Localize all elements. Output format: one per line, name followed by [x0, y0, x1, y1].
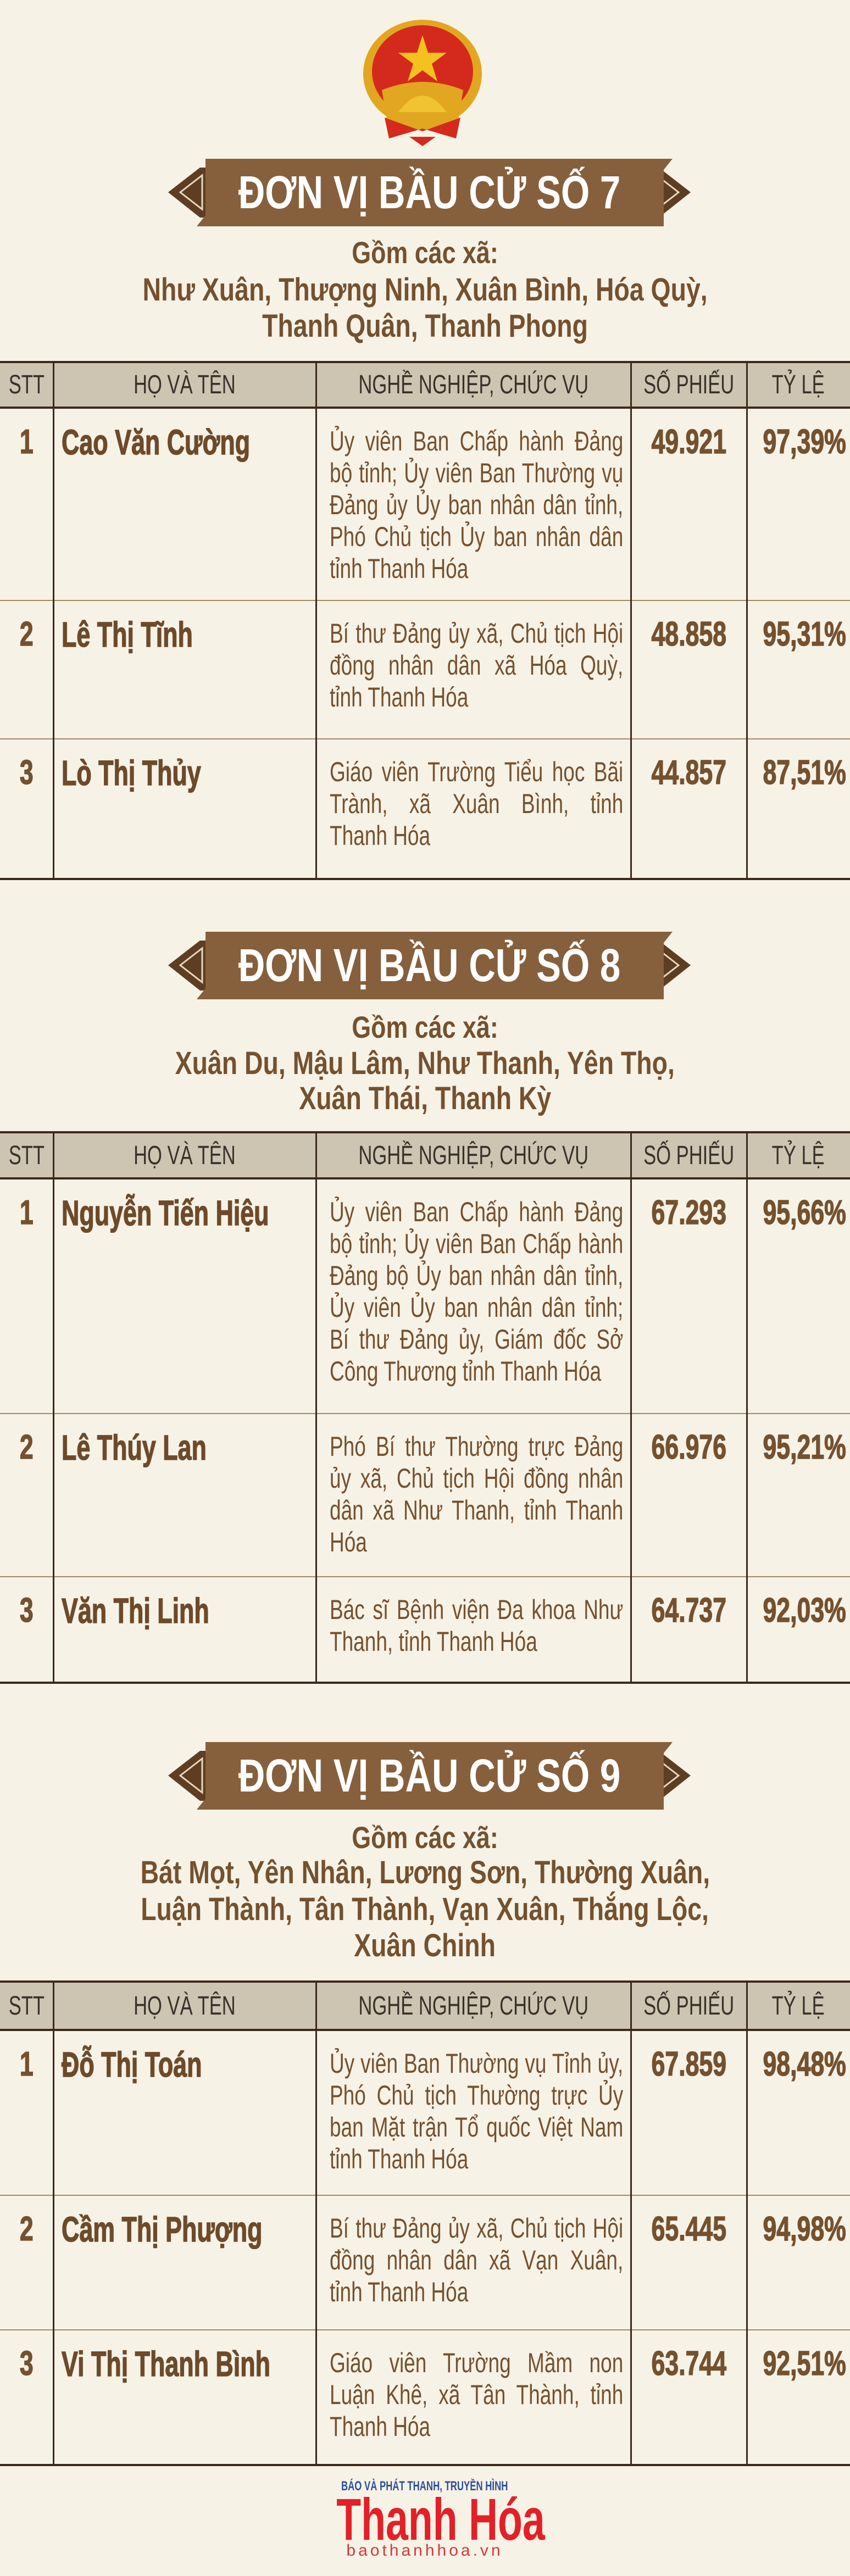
- row 1: 49.921: [651, 423, 726, 461]
- row 1: Đảng bộ Ủy ban nhân dân tỉnh,: [330, 1260, 623, 1291]
- row 1: Ủy viên Ủy ban nhân dân tỉnh;: [330, 1292, 623, 1323]
- row 1: 1: [20, 1194, 34, 1232]
- row 2: [0, 1414, 850, 1577]
- banner: section 9 title: [168, 1742, 691, 1810]
- row 3: 92,03%: [763, 1592, 846, 1629]
- row 3: 44.857: [651, 754, 726, 792]
- row 3: Thanh Hóa: [330, 820, 430, 851]
- banner: section 8 title: ĐƠN VỊ BẦU CỬ SỐ 8: [238, 939, 620, 991]
- row 3: [0, 1577, 850, 1684]
- row 2: Hóa: [330, 1527, 367, 1557]
- section 9: [140, 1742, 710, 1963]
- table: section 9: HỌ VÀ TÊN: [134, 1991, 236, 2021]
- communes: section 7: Gồm các xã:: [352, 235, 498, 270]
- row 1: Cao Văn Cường: [62, 422, 250, 462]
- row 1: tỉnh Thanh Hóa: [330, 2144, 468, 2174]
- row 2: đồng nhân dân xã Hóa Quỳ,: [330, 650, 623, 681]
- row 1: Công Thương tỉnh Thanh Hóa: [330, 1356, 601, 1387]
- communes: section 9: Xuân Chinh: [354, 1928, 496, 1963]
- row 1: 67.293: [651, 1194, 726, 1232]
- banner: section 8 title: [168, 932, 691, 999]
- row 1: 1: [20, 423, 34, 461]
- table: section 7: [0, 361, 850, 880]
- row 3: [0, 2330, 850, 2466]
- row 2: [0, 2196, 850, 2330]
- row 3: 3: [20, 1592, 34, 1629]
- row 1: Ủy viên Ban Chấp hành Đảng: [330, 426, 623, 457]
- section 8: [168, 932, 691, 1116]
- row 1: [0, 2031, 850, 2196]
- table: section 9: NGHỀ NGHIỆP, CHỨC VỤ: [358, 1991, 588, 2021]
- row 3: Luận Khê, xã Tân Thành, tỉnh: [330, 2379, 623, 2410]
- row 3: Thanh Hóa: [330, 2411, 430, 2442]
- row 1: ban Mặt trận Tổ quốc Việt Nam: [330, 2112, 623, 2143]
- table: section 8: HỌ VÀ TÊN: [134, 1140, 236, 1170]
- footer logo: baothanhhoa.vn: [346, 2541, 503, 2560]
- banner: section 7 title: ĐƠN VỊ BẦU CỬ SỐ 7: [238, 166, 620, 218]
- row 2: 95,21%: [763, 1428, 846, 1466]
- banner: section 9 title: ĐƠN VỊ BẦU CỬ SỐ 9: [238, 1750, 620, 1801]
- row 2: Bí thư Đảng ủy xã, Chủ tịch Hội: [330, 618, 623, 649]
- communes: section 9: [140, 1820, 710, 1963]
- row 2: 95,31%: [763, 615, 846, 653]
- row 3: Lò Thị Thủy: [62, 753, 201, 793]
- row 1: tỉnh Thanh Hóa: [330, 553, 468, 584]
- communes: section 8: Xuân Du, Mậu Lâm, Như Thanh, Yên Thọ,: [175, 1045, 675, 1081]
- row 2: 94,98%: [763, 2210, 846, 2248]
- row 2: Bí thư Đảng ủy xã, Chủ tịch Hội: [330, 2213, 623, 2244]
- communes: section 7: [142, 235, 708, 344]
- row 2: đồng nhân dân xã Vạn Xuân,: [330, 2245, 623, 2275]
- row 2: 66.976: [651, 1428, 726, 1466]
- communes: section 9: Bát Mọt, Yên Nhân, Lương Sơn, Thường Xuân,: [140, 1855, 710, 1890]
- row 2: 2: [20, 615, 34, 653]
- row 1: Phó Chủ tịch Thường trực Ủy: [330, 2080, 623, 2111]
- row 3: 63.744: [651, 2345, 726, 2383]
- row 2: tỉnh Thanh Hóa: [330, 682, 468, 713]
- communes: section 8: Gồm các xã:: [352, 1010, 498, 1044]
- table: section 7: HỌ VÀ TÊN: [134, 370, 236, 399]
- communes: section 7: Thanh Quân, Thanh Phong: [262, 308, 588, 344]
- row 2: Lê Thúy Lan: [62, 1428, 207, 1467]
- row 2: 48.858: [651, 615, 726, 653]
- table: section 8: STT: [9, 1140, 45, 1170]
- row 3: 3: [20, 754, 34, 792]
- row 3: Giáo viên Trường Mầm non: [330, 2347, 623, 2378]
- row 1: Đảng ủy Ủy ban nhân dân tỉnh,: [330, 489, 623, 520]
- row 2: 65.445: [651, 2210, 726, 2248]
- row 3: Bác sĩ Bệnh viện Đa khoa Như: [330, 1594, 623, 1625]
- emblem: [363, 20, 482, 146]
- footer logo: Thanh Hóa: [336, 2486, 545, 2552]
- row 3: [0, 739, 850, 880]
- row 3: 92,51%: [763, 2345, 846, 2383]
- row 3: Văn Thị Linh: [62, 1591, 209, 1631]
- row 1: 98,48%: [763, 2045, 846, 2083]
- table: section 9: SỐ PHIẾU: [643, 1991, 734, 2021]
- row 1: Ủy viên Ban Chấp hành Đảng: [330, 1197, 623, 1227]
- row 1: [0, 1179, 850, 1414]
- communes: section 8: [175, 1010, 675, 1116]
- row 3: Vi Thị Thanh Bình: [62, 2344, 270, 2384]
- table: section 7: TỶ LỆ: [772, 370, 825, 399]
- table: section 8: TỶ LỆ: [772, 1140, 825, 1170]
- row 1: Phó Chủ tịch Ủy ban nhân dân: [330, 521, 623, 552]
- row 2: 2: [20, 2210, 34, 2248]
- row 1: Ủy viên Ban Thường vụ Tỉnh ủy,: [330, 2048, 623, 2079]
- row 3: Giáo viên Trường Tiểu học Bãi: [330, 756, 623, 787]
- table: section 9: STT: [9, 1991, 45, 2021]
- row 1: Đỗ Thị Toán: [62, 2045, 202, 2084]
- row 2: Lê Thị Tĩnh: [62, 615, 193, 654]
- row 1: Bí thư Đảng ủy, Giám đốc Sở: [330, 1324, 623, 1355]
- row 3: Thanh, tỉnh Thanh Hóa: [330, 1626, 537, 1657]
- banner: section 7 title: [168, 159, 691, 226]
- row 3: 64.737: [651, 1592, 726, 1629]
- footer logo: BÁO VÀ PHÁT THANH, TRUYỀN HÌNH: [341, 2479, 508, 2494]
- row 2: ủy xã, Chủ tịch Hội đồng nhân: [330, 1463, 623, 1494]
- row 3: Trành, xã Xuân Bình, tỉnh: [330, 788, 623, 819]
- row 1: [0, 409, 850, 601]
- row 1: 97,39%: [763, 423, 846, 461]
- row 1: 95,66%: [763, 1194, 846, 1232]
- row 1: bộ tỉnh; Ủy viên Ban Chấp hành: [330, 1228, 623, 1259]
- table: section 9: TỶ LỆ: [772, 1991, 825, 2021]
- row 2: tỉnh Thanh Hóa: [330, 2277, 468, 2307]
- row 1: 67.859: [651, 2045, 726, 2083]
- row 2: 2: [20, 1428, 34, 1466]
- table: section 7: SỐ PHIẾU: [643, 370, 734, 399]
- row 2: Cầm Thị Phượng: [62, 2210, 262, 2249]
- table: section 8: SỐ PHIẾU: [643, 1140, 734, 1170]
- row 1: bộ tỉnh; Ủy viên Ban Thường vụ: [330, 458, 623, 488]
- row 3: 3: [20, 2345, 34, 2383]
- row 2: [0, 601, 850, 739]
- row 1: Nguyễn Tiến Hiệu: [62, 1193, 269, 1233]
- communes: section 7: Như Xuân, Thượng Ninh, Xuân Bình, Hóa Quỳ,: [142, 272, 708, 308]
- table: section 8: NGHỀ NGHIỆP, CHỨC VỤ: [358, 1140, 588, 1170]
- row 1: 1: [20, 2045, 34, 2083]
- table: section 8: [0, 1131, 850, 1684]
- table: section 7: STT: [9, 370, 45, 399]
- row 2: Phó Bí thư Thường trực Đảng: [330, 1431, 623, 1462]
- table: section 9: [0, 1980, 850, 2466]
- communes: section 9: Gồm các xã:: [352, 1820, 498, 1855]
- communes: section 9: Luận Thành, Tân Thành, Vạn Xuân, Thắng Lộc,: [141, 1891, 709, 1927]
- row 2: dân xã Như Thanh, tỉnh Thanh: [330, 1495, 623, 1526]
- communes: section 8: Xuân Thái, Thanh Kỳ: [299, 1081, 551, 1116]
- row 3: 87,51%: [763, 754, 846, 792]
- section 7: [142, 159, 708, 344]
- table: section 7: NGHỀ NGHIỆP, CHỨC VỤ: [358, 370, 588, 399]
